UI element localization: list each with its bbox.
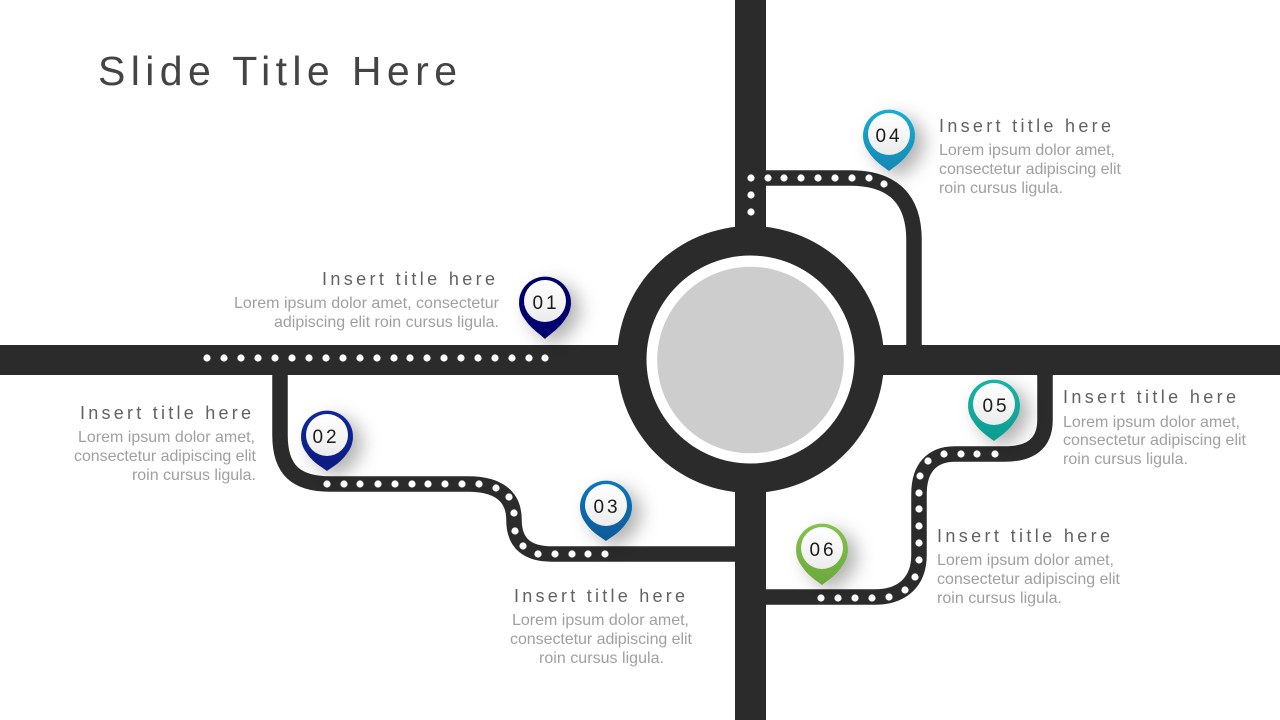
central roundabout (617, 226, 884, 493)
text block 04: Insert title here (939, 116, 1111, 136)
text block 01: Insert title here (322, 269, 495, 289)
text block 05: Lorem ipsum dolor amet, (1063, 414, 1240, 431)
pin 03 (580, 481, 632, 541)
text block 02: Lorem ipsum dolor amet, (78, 429, 255, 446)
text block 04: roin cursus ligula. (939, 180, 1063, 197)
text block 06: roin cursus ligula. (937, 590, 1062, 607)
pin 02 (301, 411, 353, 471)
text block 04: Lorem ipsum dolor amet, (939, 142, 1115, 159)
text block 02: consectetur adipiscing elit (74, 448, 257, 465)
text block 06: consectetur adipiscing elit (937, 571, 1121, 588)
text block 06 (937, 526, 1121, 607)
text block 03: consectetur adipiscing elit (510, 631, 693, 648)
text block 05: roin cursus ligula. (1063, 451, 1188, 468)
pin 03: 03 (593, 497, 621, 518)
branch road 02 and 03 (280, 370, 740, 554)
pin 02: 02 (312, 427, 340, 448)
pin 04: 04 (875, 126, 903, 147)
text block 02 (74, 403, 257, 484)
text block 03 (510, 586, 693, 667)
pin 06 (796, 524, 848, 585)
dotted route 04 (747, 174, 888, 216)
text block 01: Lorem ipsum dolor amet, consectetur (234, 295, 500, 312)
text block 05: Insert title here (1063, 387, 1236, 407)
pin 01: 01 (532, 293, 560, 314)
pin 01 (519, 277, 571, 339)
text block 02: roin cursus ligula. (132, 467, 256, 484)
text block 06: Insert title here (937, 526, 1110, 546)
text block 05: consectetur adipiscing elit (1063, 432, 1247, 449)
text block 06: Lorem ipsum dolor amet, (937, 552, 1114, 569)
text block 05 (1063, 387, 1247, 468)
pin 06: 06 (809, 540, 837, 561)
text block 02: Insert title here (80, 403, 251, 423)
text block 03: Insert title here (514, 586, 685, 606)
pin 05: 05 (982, 396, 1010, 417)
text block 04: consectetur adipiscing elit (939, 161, 1122, 178)
vertical main road (735, 0, 766, 720)
title: Slide Title Here (98, 48, 457, 94)
pin 04 (863, 110, 915, 171)
pin 05 (968, 380, 1020, 441)
dotted route 01 (203, 354, 549, 362)
dotted route 05 and 06 (817, 450, 999, 602)
text block 01: adipiscing elit roin cursus ligula. (274, 314, 499, 331)
dotted route 02 and 03 (323, 480, 609, 558)
branch road 05 and 06 (760, 370, 1045, 597)
text block 03: Lorem ipsum dolor amet, (512, 612, 689, 629)
text block 01 (234, 269, 500, 331)
branch road 04 (751, 178, 914, 350)
horizontal main road (0, 345, 1280, 375)
text block 04 (939, 116, 1122, 197)
text block 03: roin cursus ligula. (539, 650, 664, 667)
